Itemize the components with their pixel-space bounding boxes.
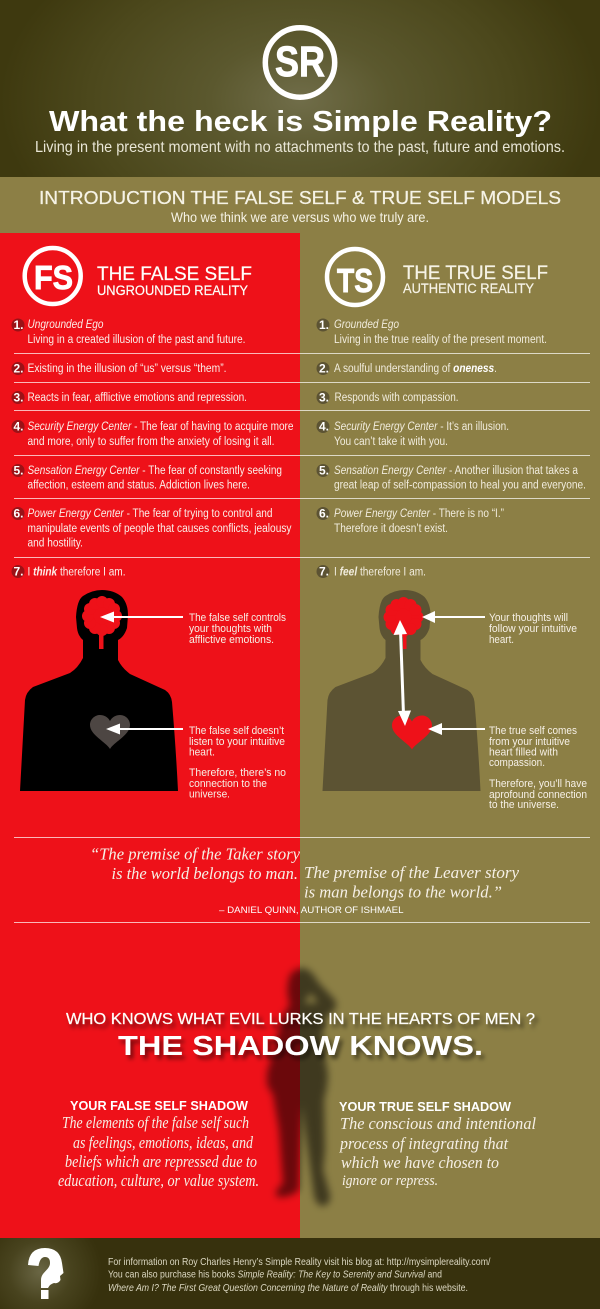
logo: SR: SR — [275, 38, 325, 86]
callout: thoughts: follow your intuitive — [489, 623, 577, 635]
heading: introduction: INTRODUCTION THE FALSE SELF & TRUE SELF MODELS — [39, 187, 561, 208]
item 7 — [316, 564, 426, 578]
callout: heart: universe. — [189, 788, 230, 800]
text block: your true self shadow: ignore or repress. — [342, 1173, 438, 1189]
heading: the shadow knows: THE SHADOW KNOWS. — [118, 1030, 483, 1061]
item 6: 6. — [14, 506, 24, 520]
list: false self items — [12, 318, 294, 578]
text block: your false self shadow: education, culture, or value system. — [58, 1171, 259, 1190]
item 5 — [316, 464, 586, 492]
callout: heart — [189, 725, 286, 800]
list: true self items — [316, 318, 586, 578]
item 1: Living in a created illusion of the past and future. — [28, 334, 246, 346]
silhouette body — [322, 590, 480, 791]
item 6 — [12, 506, 292, 550]
item 4: Security Energy Center - The fear of having to acquire more — [28, 421, 294, 433]
heading: introduction: Who we think we are versus who we truly are. — [171, 209, 429, 225]
item 5 — [12, 464, 282, 492]
item 1: Ungrounded Ego — [28, 319, 104, 331]
item 7: 7. — [14, 564, 24, 578]
heart — [392, 716, 432, 750]
text block: your false self shadow: YOUR FALSE SELF SHADOW — [70, 1099, 248, 1113]
item 3 — [316, 390, 458, 404]
text: book information: Where Am I? The First Great Question Concerning the Nature of Reality through his website. — [108, 1282, 468, 1294]
item 1: 1. — [14, 318, 24, 332]
item 4: You can’t take it with you. — [334, 436, 448, 448]
arrow to heart — [428, 723, 485, 735]
heading: who knows: WHO KNOWS WHAT EVIL LURKS IN THE HEARTS OF MEN ? — [66, 1011, 535, 1028]
callout: heart: Therefore, you’ll have — [489, 778, 587, 790]
callout: heart: listen to your intuitive — [189, 736, 285, 748]
attribution: – DANIEL QUINN, AUTHOR OF ISHMAEL — [219, 905, 404, 916]
heading: introduction — [39, 187, 561, 225]
text block: your false self shadow: as feelings, emotions, ideas, and — [73, 1133, 253, 1152]
callout: thoughts — [189, 612, 286, 646]
text block: your true self shadow: which we have chosen to — [341, 1153, 499, 1172]
quote — [90, 844, 519, 916]
item 2: A soulful understanding of oneness. — [334, 363, 497, 375]
text block: your false self shadow — [58, 1099, 259, 1190]
quote: taker — [90, 844, 300, 883]
icon: FS logo — [25, 248, 81, 304]
heart — [90, 715, 130, 749]
quote: leaver — [304, 863, 519, 902]
callout: heart — [489, 725, 587, 811]
diagram: true self silhouette — [322, 590, 587, 811]
panel: left red background — [0, 233, 300, 1238]
quote: taker: “The premise of the Taker story — [90, 844, 300, 863]
heading: the false self: THE FALSE SELF — [97, 263, 252, 285]
callout: heart: heart. — [189, 746, 215, 758]
item 6 — [316, 506, 504, 535]
callout: thoughts: heart. — [489, 634, 514, 646]
item 3: Responds with compassion. — [334, 392, 458, 404]
text block: your true self shadow: The conscious and intentional — [340, 1114, 536, 1133]
item 7 — [12, 564, 126, 578]
logo: SR — [265, 28, 335, 97]
item 3: Reacts in fear, afflictive emotions and repression. — [28, 392, 247, 404]
item 4 — [316, 420, 509, 448]
item 7: 7. — [319, 564, 329, 578]
item 5: 5. — [319, 464, 329, 478]
brain — [82, 596, 122, 649]
item 4: and more, only to suffer from the anxiety of losing it all. — [28, 436, 274, 448]
callout: heart: The true self comes — [489, 725, 577, 737]
icon: TS logo: TS — [337, 262, 373, 299]
panel: header — [0, 0, 600, 177]
callout: heart: aprofound connection — [489, 789, 587, 801]
arrow to heart — [106, 724, 183, 734]
item 7: I feel therefore I am. — [334, 566, 426, 578]
panel: true self heading — [327, 249, 548, 305]
title: What the heck is Simple Reality? — [49, 106, 552, 138]
brain — [384, 597, 424, 649]
callout: thoughts: afflictive emotions. — [189, 634, 274, 646]
text block: your true self shadow — [339, 1100, 536, 1189]
subheading: ungrounded reality: UNGROUNDED REALITY — [97, 283, 248, 298]
double arrow brain to heart — [394, 620, 411, 726]
quote: leaver: is man belongs to the world.” — [304, 883, 502, 902]
item 7: I think therefore I am. — [28, 566, 126, 578]
text: book information — [108, 1256, 491, 1294]
item 6: Therefore it doesn’t exist. — [334, 523, 448, 535]
callout: thoughts: Your thoughts will — [489, 612, 568, 624]
item 6: and hostility. — [28, 538, 83, 550]
arrow to brain — [100, 612, 183, 622]
item 4: 4. — [319, 420, 329, 434]
item 4: 4. — [14, 420, 24, 434]
callout: thoughts: your thoughts with — [189, 623, 272, 635]
item 3: 3. — [14, 390, 24, 404]
callout: heart: The false self doesn’t — [189, 725, 285, 737]
text block: your true self shadow: process of integrating that — [339, 1134, 509, 1153]
panel: false self heading — [25, 248, 252, 304]
item 1: Living in the true reality of the present moment. — [334, 334, 547, 346]
icon: question mark with face — [28, 1248, 64, 1299]
callout: thoughts — [489, 612, 577, 646]
dividers — [14, 354, 590, 922]
arrow to brain — [422, 611, 485, 623]
item 5: affection, esteem and status. Addiction lives here. — [28, 480, 250, 492]
quote: leaver: The premise of the Leaver story — [304, 863, 519, 882]
item 1: 1. — [319, 318, 329, 332]
item 4 — [12, 420, 294, 448]
item 6: Power Energy Center - The fear of trying to control and — [28, 508, 272, 520]
callout: thoughts: The false self controls — [189, 612, 286, 624]
icon: FS logo: FS — [34, 259, 73, 296]
panel: footer — [0, 1238, 600, 1309]
callout: heart: to the universe. — [489, 799, 559, 811]
diagram: false self silhouette — [20, 590, 286, 800]
item 1 — [12, 318, 246, 346]
item 2: Existing in the illusion of “us” versus “them”. — [28, 363, 226, 375]
text: book information: You can also purchase his books Simple Reality: The Key to Serenity and Survival and — [108, 1269, 442, 1281]
item 5: Sensation Energy Center - Another illusion that takes a — [334, 465, 579, 477]
callout: heart: heart filled with — [489, 746, 558, 758]
item 2: 2. — [319, 362, 329, 376]
callout: heart: Therefore, there’s no — [189, 767, 286, 779]
callout: heart: compassion. — [489, 757, 545, 769]
heading: who knows — [66, 1011, 535, 1061]
heading: the true self: THE TRUE SELF — [403, 262, 548, 284]
item 3: 3. — [319, 390, 329, 404]
text: book information: For information on Roy Charles Henry’s Simple Reality visit his blog at: http://mysimplereality.com/ — [108, 1256, 491, 1268]
item 1 — [316, 318, 547, 346]
silhouette body — [20, 590, 178, 791]
item 2: 2. — [14, 362, 24, 376]
item 6: manipulate events of people that causes conflicts, jealousy — [28, 523, 292, 535]
subheading: authentic reality: AUTHENTIC REALITY — [403, 281, 534, 296]
text block: your true self shadow: YOUR TRUE SELF SHADOW — [339, 1100, 511, 1114]
item 4: Security Energy Center - It’s an illusion. — [334, 421, 509, 433]
item 5: 5. — [14, 464, 24, 478]
panel: introduction band — [0, 177, 600, 233]
item 5: Sensation Energy Center - The fear of constantly seeking — [28, 465, 282, 477]
quote: taker: is the world belongs to man. — [112, 864, 298, 883]
text block: your false self shadow: The elements of the false self such — [62, 1113, 249, 1132]
text block: your false self shadow: beliefs which are repressed due to — [65, 1152, 257, 1171]
callout: heart: connection to the — [189, 778, 267, 790]
item 6: 6. — [319, 506, 329, 520]
callout: heart: from your intuitive — [489, 736, 570, 748]
item 1: Grounded Ego — [334, 319, 400, 331]
icon: TS logo — [327, 249, 383, 305]
item 6: Power Energy Center - There is no “I.” — [334, 508, 504, 520]
panel: right olive background — [300, 177, 600, 1238]
shadow figure — [267, 968, 336, 1206]
